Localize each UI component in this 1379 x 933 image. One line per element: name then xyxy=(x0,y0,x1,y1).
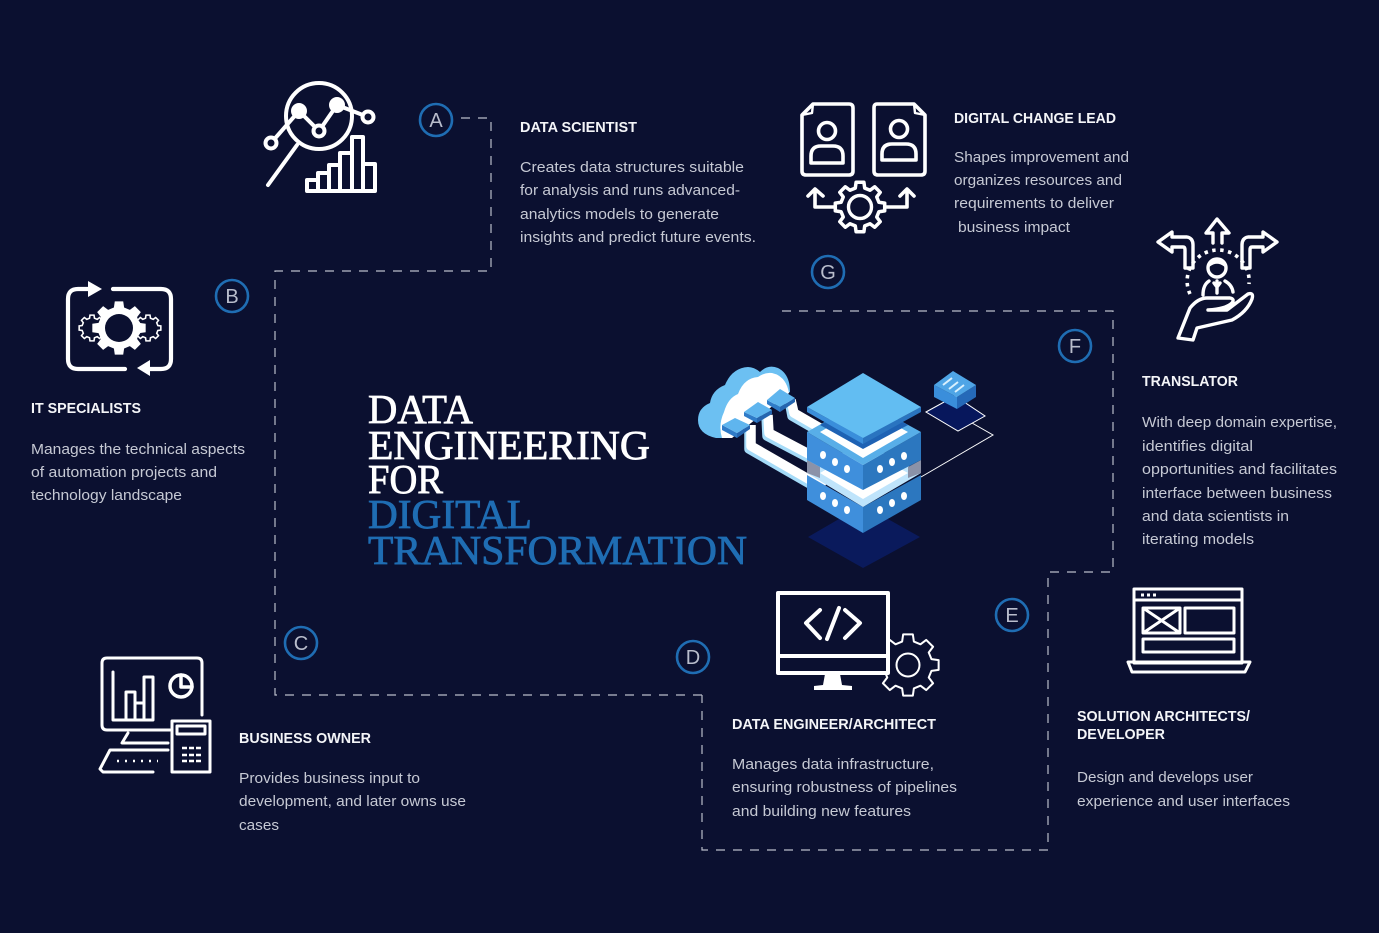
title: TRANSFORMATION xyxy=(368,527,747,573)
description: of automation projects and xyxy=(31,465,217,481)
badge G: G xyxy=(820,262,836,284)
connector chips xyxy=(722,389,795,438)
cables xyxy=(749,400,827,491)
icon: code monitor with gear xyxy=(778,593,939,696)
badge C xyxy=(285,627,317,659)
title: DIGITAL xyxy=(368,491,532,537)
description: identifies digital xyxy=(1142,439,1253,455)
description xyxy=(31,442,245,504)
panel: data scientist xyxy=(266,83,756,246)
description: Manages data infrastructure, xyxy=(732,757,934,773)
icon: computer with charts and calculator xyxy=(100,658,210,772)
upper server block xyxy=(807,400,921,490)
badge D: D xyxy=(686,647,700,669)
panel: IT specialists xyxy=(31,281,245,504)
description: for analysis and runs advanced- xyxy=(520,183,740,199)
server lid xyxy=(807,373,921,444)
badge A xyxy=(420,104,452,136)
floating chip with outline link xyxy=(921,371,993,477)
description: Design and develops user xyxy=(1077,770,1253,786)
description: requirements to deliver xyxy=(954,196,1114,212)
badge F xyxy=(1059,330,1091,362)
badge D xyxy=(677,641,709,673)
panel: digital change lead xyxy=(802,104,1129,236)
badge E: E xyxy=(1005,605,1019,627)
badge F: F xyxy=(1069,336,1081,358)
description: and building new features xyxy=(732,804,911,820)
description: development, and later owns use xyxy=(239,794,466,810)
description xyxy=(1142,415,1337,548)
description: Manages the technical aspects xyxy=(31,442,245,458)
description: opportunities and facilitates xyxy=(1142,462,1337,478)
dashed connector path xyxy=(275,118,1113,850)
description: iterating models xyxy=(1142,532,1254,548)
icon: laptop wireframe xyxy=(1128,589,1250,672)
badge B xyxy=(216,280,248,312)
badge E xyxy=(996,599,1028,631)
badge B: B xyxy=(225,286,239,308)
heading: DIGITAL CHANGE LEAD xyxy=(954,110,1116,127)
title: DATA xyxy=(368,386,473,432)
description: Provides business input to xyxy=(239,771,420,787)
description: Creates data structures suitable xyxy=(520,160,744,176)
badge A: A xyxy=(429,110,443,132)
description: cases xyxy=(239,818,279,834)
badge G xyxy=(812,256,844,288)
cloud xyxy=(698,367,790,438)
heading: IT SPECIALISTS xyxy=(31,400,141,417)
description xyxy=(520,160,756,246)
panel: data engineer/architect xyxy=(732,593,957,820)
lower server block xyxy=(807,441,921,533)
icon: gears with cycle arrows xyxy=(68,281,171,376)
title: FOR xyxy=(368,456,444,502)
badge C: C xyxy=(294,633,308,655)
heading: DATA SCIENTIST xyxy=(520,119,637,136)
description xyxy=(954,150,1129,236)
panel: translator xyxy=(1142,219,1337,548)
heading: DEVELOPER xyxy=(1077,726,1165,743)
description xyxy=(239,771,466,834)
icon: person in hand with arrows xyxy=(1158,219,1277,340)
panel: solution architects/developer xyxy=(1077,589,1290,810)
heading: DATA ENGINEER/ARCHITECT xyxy=(732,716,936,733)
description: Shapes improvement and xyxy=(954,150,1129,166)
description: insights and predict future events. xyxy=(520,230,756,246)
heading: TRANSLATOR xyxy=(1142,373,1238,390)
icon: profile documents with gear xyxy=(802,104,925,232)
description: experience and user interfaces xyxy=(1077,794,1290,810)
shadow xyxy=(808,505,920,568)
description xyxy=(732,757,957,820)
description: interface between business xyxy=(1142,486,1332,502)
heading: SOLUTION ARCHITECTS/ xyxy=(1077,708,1251,725)
description: and data scientists in xyxy=(1142,509,1289,525)
description: With deep domain expertise, xyxy=(1142,415,1337,431)
illustration: cloud connected to server stack xyxy=(698,367,993,568)
panel: business owner xyxy=(100,658,466,834)
description: technology landscape xyxy=(31,488,182,504)
description xyxy=(1077,770,1290,810)
description: ensuring robustness of pipelines xyxy=(732,780,957,796)
description: business impact xyxy=(958,220,1070,236)
description: analytics models to generate xyxy=(520,207,719,223)
heading: BUSINESS OWNER xyxy=(239,730,371,747)
heading xyxy=(1077,708,1251,743)
title xyxy=(368,386,747,573)
title: ENGINEERING xyxy=(368,422,650,468)
description: organizes resources and xyxy=(954,173,1122,189)
icon: magnifier with chart xyxy=(266,83,375,191)
